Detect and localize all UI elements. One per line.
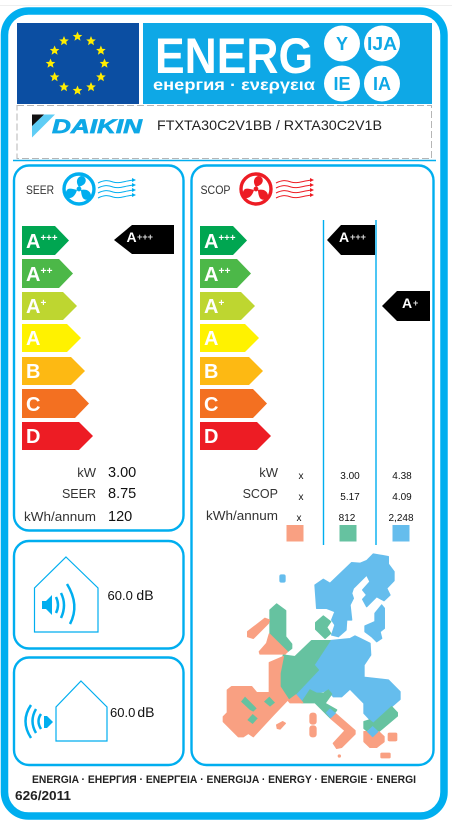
rating arrow: A+: +	[413, 298, 418, 308]
icon: heating fan	[241, 174, 314, 204]
supplier and model box: DAIKIN	[52, 116, 143, 138]
rating scale: C	[26, 394, 40, 416]
rating scale: A	[204, 231, 218, 253]
SCOP value table: x	[296, 513, 302, 524]
SCOP value table: x	[298, 471, 304, 482]
rating scale: +++	[40, 233, 58, 244]
supplier and model box	[17, 106, 432, 158]
rating scale: A	[26, 231, 40, 253]
SCOP value table: x	[298, 492, 304, 503]
noise value: 60.0dB	[110, 704, 154, 720]
SCOP value table: kWh/annum	[206, 508, 278, 523]
rating arrow: A+++: +++	[137, 232, 153, 242]
SEER values: 3.00	[108, 465, 136, 481]
rating scale: A	[26, 328, 40, 350]
icon: house with speaker inside	[34, 557, 98, 632]
SEER values: 120	[108, 509, 132, 525]
rating arrow: A+++: A	[339, 229, 349, 245]
rating scale: B	[204, 361, 218, 383]
SCOP value table: 4.09	[392, 492, 412, 503]
rating scale: B	[26, 361, 40, 383]
rating scale: A	[204, 264, 218, 286]
noise value: 60.0 dB	[108, 587, 154, 603]
energy header banner: енергия · ενεργεια	[153, 77, 315, 94]
rating scale: C	[204, 394, 218, 416]
SCOP value table	[206, 465, 414, 542]
SEER values: 8.75	[108, 486, 136, 502]
SCOP value table: 812	[339, 513, 356, 524]
SCOP value table: 3.00	[340, 471, 360, 482]
rating arrow: A+	[382, 291, 430, 321]
panel: SCOP	[192, 166, 434, 765]
climate map of Europe	[223, 554, 400, 758]
panel: SEER	[14, 166, 184, 530]
rating scale: D	[204, 426, 218, 448]
rating arrow: A+++: A	[126, 229, 137, 245]
rating arrow: A+: A	[402, 295, 412, 311]
rating scale: D	[26, 426, 40, 448]
SEER values: SEER	[62, 487, 96, 501]
energy header banner: ENERG	[155, 28, 313, 84]
rating arrow: A+++: +++	[350, 232, 366, 242]
footer: energy in languages: ENERGIA · ЕНЕРГИЯ · ΕΝΕΡΓΕΙΑ · ENERGIJA · ENERGY · ENERGIE · ENERGI	[32, 774, 416, 786]
rating scale: A	[26, 264, 40, 286]
energy header banner: IA	[373, 74, 391, 94]
rating scale: +	[40, 298, 46, 309]
SCOP value table: SCOP	[243, 487, 278, 501]
supplier and model box: FTXTA30C2V1BB / RXTA30C2V1B	[157, 117, 382, 133]
rating scale: A	[204, 328, 218, 350]
panel: outdoor noise	[14, 658, 184, 765]
panel: indoor noise	[14, 541, 184, 648]
rating scale	[200, 226, 271, 450]
SEER values: kW	[77, 465, 97, 480]
rating scale: A	[26, 296, 40, 318]
rating arrow: A+++	[327, 225, 375, 255]
rating scale: A	[204, 296, 218, 318]
footer: regulation number: 626/2011	[15, 789, 71, 803]
SEER values: kWh/annum	[24, 509, 96, 524]
rating scale: +	[218, 298, 224, 309]
energy header banner: IE	[333, 74, 351, 94]
heading: SEER: SEER	[26, 183, 54, 197]
SCOP value table: 4.38	[392, 471, 412, 482]
EU flag	[17, 23, 139, 104]
SEER values	[24, 465, 136, 525]
rating scale: ++	[218, 266, 231, 277]
rating scale: +++	[218, 233, 236, 244]
icon: house with speaker outside	[26, 681, 107, 741]
rating arrow: A+++	[114, 225, 174, 254]
icon: cooling fan	[64, 174, 136, 204]
rating scale	[22, 226, 93, 450]
energy header banner: IJA	[367, 34, 397, 54]
energy header banner	[143, 23, 432, 104]
SCOP value table: 2,248	[388, 513, 414, 524]
heading: SCOP: SCOP	[200, 183, 230, 197]
SCOP value table: 5.17	[340, 492, 360, 503]
rating scale: ++	[40, 266, 53, 277]
energy header banner: Y	[336, 34, 348, 54]
SCOP value table: kW	[259, 465, 279, 480]
